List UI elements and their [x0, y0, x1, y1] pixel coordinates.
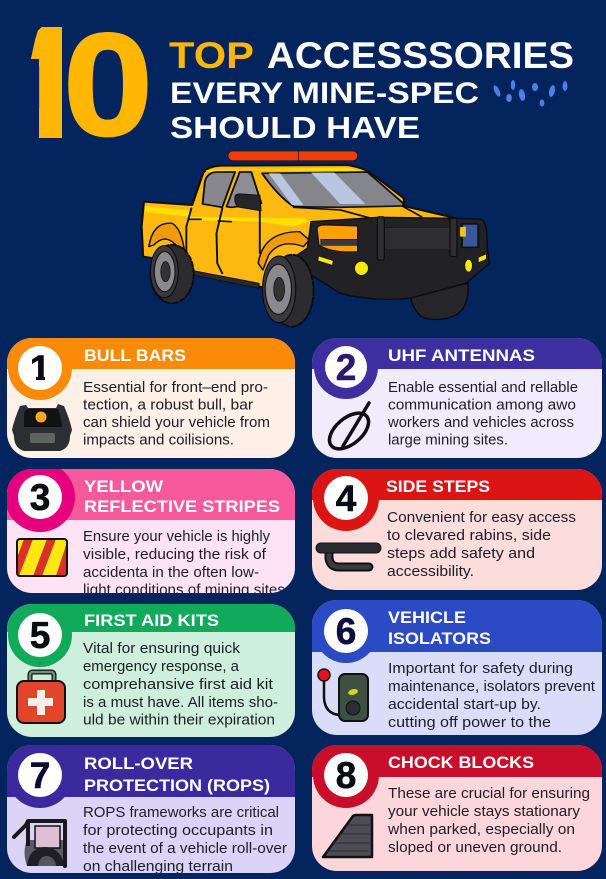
panel: 5 first aid kits: 5: [30, 615, 50, 656]
heading: vehicle isolators: [388, 612, 490, 644]
text: ROPS description: [83, 804, 287, 875]
text: chock blocks description: when parked, especially on: [387, 821, 575, 838]
icon: roll-over frame: [14, 821, 67, 866]
body highlights: [145, 168, 363, 272]
text: side steps description: steps add safety and: [387, 545, 535, 562]
text: bull bars description: Essential for front–end pro-: [83, 379, 268, 396]
side mirror: [235, 194, 261, 211]
icon: blue droplets: [492, 80, 567, 106]
text: first aid kits description: uld be within their expiration: [83, 712, 275, 728]
panel: 1 bull bars: [7, 336, 295, 458]
text: bull bars description: tection, a robust bull, bar: [83, 396, 253, 414]
text: vehicle isolators description: accidental start-up by.: [388, 696, 541, 713]
text: first aid kits description: is a must have. All items sho-: [83, 694, 278, 711]
text: UHF antennas description: communication among awo: [388, 396, 576, 414]
text: side steps description: Convenient for easy access: [387, 509, 576, 526]
text: UHF antennas description: workers and vehicles across: [387, 414, 574, 431]
door lines: [186, 206, 421, 273]
text: bull bars description: [83, 379, 270, 448]
panel: 3 yellow reflective stripes: [5, 462, 295, 598]
heading: chock blocks: CHOCK BLOCKS: [388, 753, 534, 772]
heading: vehicle isolators: ISOLATORS: [388, 629, 491, 648]
icon: reflective stripes: [17, 539, 67, 576]
front wheel: [263, 255, 314, 327]
windshield: [262, 172, 404, 207]
truck body: [141, 165, 468, 287]
panel: 6 vehicle isolators: 6: [336, 611, 356, 652]
illustration: yellow mine-spec truck: [141, 151, 489, 327]
panel: 4 side steps: [312, 465, 602, 590]
panel: 4 side steps: 4: [336, 478, 357, 519]
title: heading text: [169, 35, 574, 145]
panel: 7 roll-over protection: 7: [30, 755, 50, 796]
heading: roll-over protection: PROTECTION (ROPS): [84, 776, 270, 795]
text: vehicle isolators description: [388, 660, 596, 731]
text: reflective stripes description: visible, reducing the risk of: [83, 546, 267, 563]
far front wheel: [410, 283, 468, 320]
text: chock blocks description: sloped or uneven ground.: [388, 839, 562, 856]
panel: 8 chock blocks: [312, 742, 602, 871]
heading: side steps: SIDE STEPS: [386, 477, 490, 496]
title: big number 10: [31, 27, 148, 138]
heading: yellow reflective stripes: [84, 480, 280, 512]
text: bull bars description: impacts and coilisions.: [83, 432, 234, 448]
heading: yellow reflective stripes: REFLECTIVE STRIPES: [84, 497, 280, 516]
text: vehicle isolators description: maintenance, isolators prevent: [388, 678, 596, 695]
text: reflective stripes description: [83, 530, 284, 593]
text: ROPS description: on challenging terrain: [83, 858, 233, 875]
heading: yellow reflective stripes: YELLOW: [84, 477, 164, 496]
text: reflective stripes description: light conditions of mining sites: [83, 582, 285, 598]
icon: chock block: [323, 815, 372, 857]
rear wheel: [150, 245, 194, 303]
text: reflective stripes description: accidenta in the often low-: [83, 564, 259, 581]
text: first aid kits description: comprehansive first aid kit: [83, 676, 274, 693]
text: side steps description: [387, 509, 576, 580]
text: UHF antennas description: large mining sites.: [388, 432, 508, 448]
heading: roll-over protection: ROLL-OVER: [84, 754, 193, 773]
bull bar bumper: [295, 217, 489, 299]
title: heading text: SHOULD HAVE: [170, 110, 420, 145]
text: side steps description: to clevared rabins, side: [387, 527, 551, 544]
icon: battery isolator switch: [318, 669, 368, 721]
roof light bar: [228, 151, 358, 161]
heading: UHF antennas: UHF ANTENNAS: [388, 346, 535, 365]
text: chock blocks description: These are crucial for ensuring: [388, 785, 590, 802]
panel: 5 first aid kits: [7, 603, 295, 737]
text: first aid kits description: Vital for ensuring quick: [83, 640, 241, 657]
heading: roll-over protection: [85, 758, 270, 794]
panel: 2 UHF antennas: 2: [336, 347, 356, 388]
heading: first aid kits: FIRST AID KITS: [84, 611, 219, 630]
title: heading text: EVERY MINE-SPEC: [170, 77, 479, 110]
title: big number 10: 1: [22, 4, 78, 163]
text: vehicle isolators description: Important for safety during: [388, 660, 573, 677]
text: UHF antennas description: Enable essential and rellable: [388, 379, 578, 396]
text: first aid kits description: [83, 640, 278, 728]
text: chock blocks description: your vehicle stays stationary: [388, 803, 581, 820]
title: big number 10: 0: [63, 3, 153, 166]
panel: 1 bull bars: 1: [30, 348, 50, 389]
text: side steps description: accessibility.: [387, 563, 474, 580]
icon: first aid kit: [17, 672, 65, 723]
text: ROPS description: ROPS frameworks are critical: [83, 804, 279, 821]
panel: 6 vehicle isolators: [312, 599, 602, 735]
text: chock blocks description: [387, 785, 590, 856]
icon: UHF antenna: [328, 401, 371, 451]
text: reflective stripes description: Ensure your vehicle is highly: [83, 528, 270, 545]
icon: bull bar: [12, 404, 72, 451]
text: ROPS description: for protecting occupants in: [83, 822, 273, 839]
heading: vehicle isolators: VEHICLE: [388, 608, 466, 627]
panel: 8 chock blocks: 8: [336, 755, 356, 796]
icon: side step: [316, 543, 381, 567]
title: heading text: ACCESSSORIES: [267, 35, 574, 76]
text: bull bars description: can shield your vehicle from: [83, 414, 270, 431]
text: first aid kits description: emergency response, a: [83, 658, 240, 675]
panel: 7 roll-over protection: [7, 742, 295, 875]
text: ROPS description: the event of a vehicle roll-over: [83, 840, 287, 857]
side step: [193, 271, 259, 288]
side windows: [203, 172, 261, 207]
panel: 2 UHF antennas: [312, 335, 602, 458]
title: heading text: TOP: [169, 35, 254, 76]
text: vehicle isolators description: cutting off power to the: [388, 714, 551, 731]
bumper fog lights: [318, 254, 486, 275]
text: UHF antennas description: [387, 379, 578, 448]
panel: 3 yellow reflective stripes: 3: [30, 477, 50, 518]
heading: bull bars: BULL BARS: [84, 346, 186, 365]
